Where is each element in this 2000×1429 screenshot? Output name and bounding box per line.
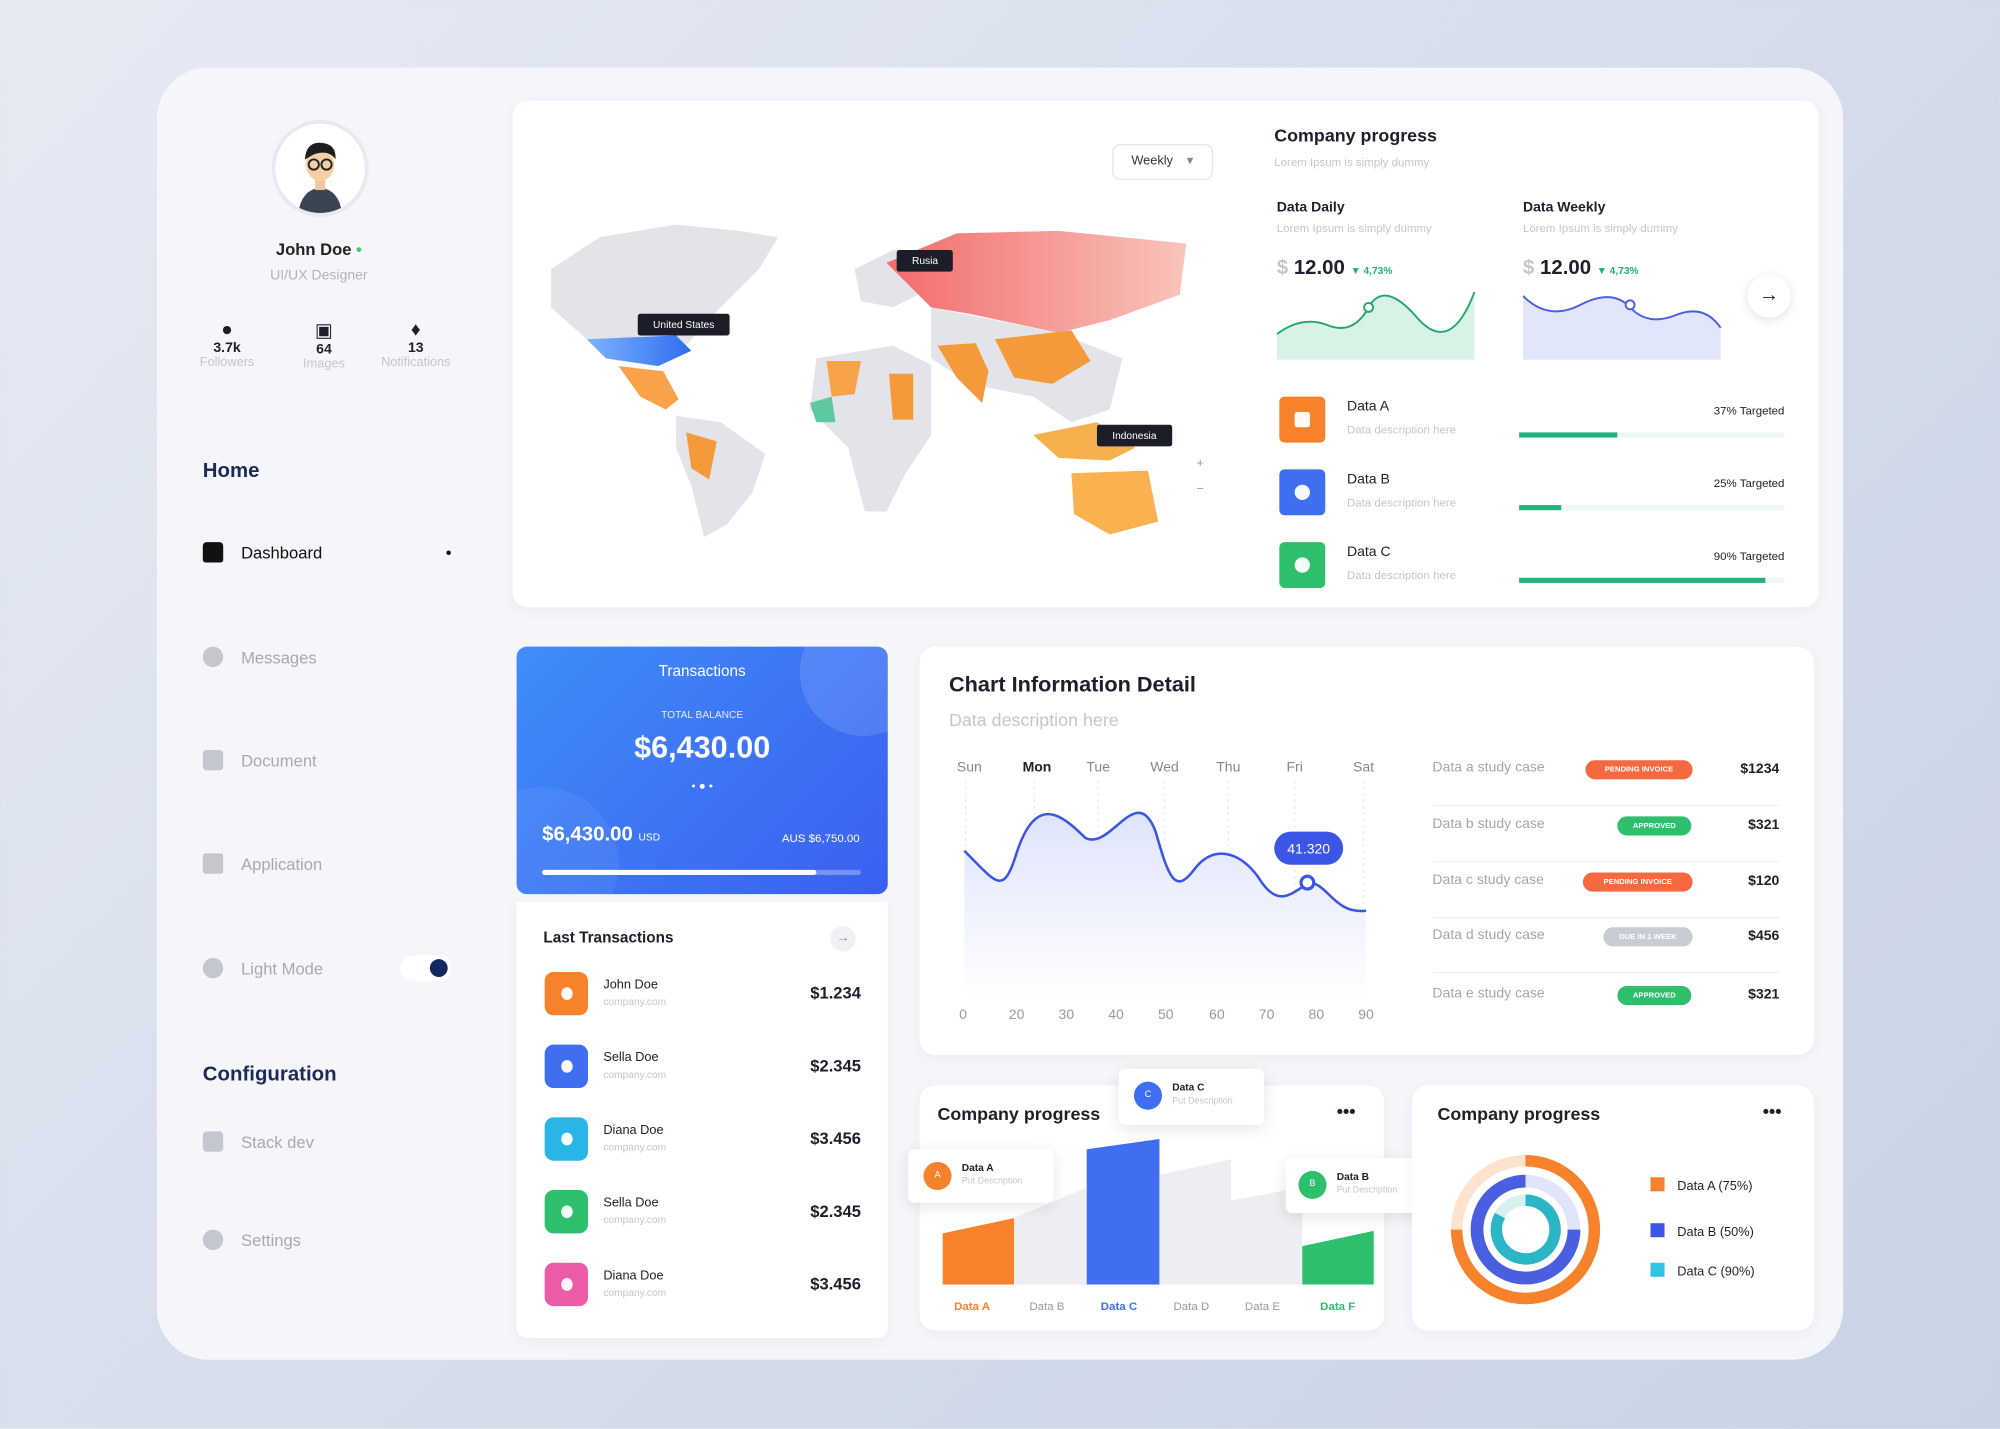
panel: company progress bar chart: Data E (1245, 1300, 1280, 1312)
line chart: Mon (1023, 759, 1051, 775)
legend: Data C (90%) (1677, 1265, 1755, 1279)
line chart: 40 (1108, 1006, 1124, 1022)
panel: transactions card: $6,430.00 (634, 731, 770, 765)
panel: last transactions: Sella Doe (603, 1051, 659, 1065)
panel: last transactions: Sella Doe (603, 1196, 659, 1210)
nav: application (202, 853, 322, 874)
data daily: Lorem Ipsum is simply dummy (1277, 222, 1432, 235)
line chart: 30 (1059, 1006, 1074, 1022)
line chart: Thu (1216, 759, 1240, 775)
study case list: $120 (1748, 874, 1779, 889)
line chart: 41.320 (1287, 840, 1330, 856)
panel: last transactions: Diana Doe (603, 1124, 664, 1138)
legend: Data A (75%) (1677, 1180, 1752, 1194)
panel: last transactions: $2.345 (810, 1056, 861, 1075)
name: John Doe • (276, 240, 362, 259)
nav: light mode (202, 956, 452, 980)
data daily: $ 12.00 ▼ 4,73% (1277, 258, 1392, 279)
callout: data B (1286, 1158, 1430, 1213)
data weekly: Data Weekly (1523, 200, 1605, 216)
panel: company progress bar chart: Data C (1101, 1300, 1137, 1312)
study case list: $321 (1748, 987, 1779, 1003)
callout: data A: Put Description (962, 1177, 1022, 1186)
data A row: 37% Targeted (1714, 404, 1784, 417)
data daily: Data Daily (1277, 200, 1345, 216)
data A row: Data description here (1347, 423, 1456, 436)
panel: last transactions: company.com (603, 1287, 666, 1298)
data A row: Data A (1347, 399, 1389, 415)
panel: last transactions: John Doe (603, 978, 658, 992)
nav: dashboard: • (446, 543, 452, 562)
callout: data C: Data C (1172, 1082, 1205, 1093)
data C row (1279, 542, 1784, 588)
data C row: Data C (1347, 545, 1391, 560)
panel: transactions card: TOTAL BALANCE (661, 709, 743, 721)
line chart: Fri (1286, 759, 1303, 775)
panel: last transactions: Last Transactions (543, 929, 674, 946)
panel: last transactions: company.com (603, 1214, 666, 1226)
data C row: Data description here (1347, 569, 1456, 582)
panel: last transactions: $3.456 (810, 1129, 861, 1148)
callout: data C: Put Description (1172, 1097, 1233, 1106)
panel: last transactions: company.com (603, 996, 666, 1008)
weekly dropdown: Weekly ▾ (1131, 154, 1193, 168)
callout: data C: C (1145, 1091, 1151, 1099)
stats: 64 (316, 342, 332, 357)
panel: last transactions: company.com (603, 1142, 666, 1153)
panel: company progress bar chart: Data B (1029, 1300, 1064, 1312)
data A row (1279, 396, 1784, 443)
panel: transactions card: AUS $6,750.00 (782, 832, 860, 844)
line chart: 80 (1309, 1006, 1324, 1022)
avatar (272, 120, 369, 217)
study case list: $1234 (1740, 761, 1779, 777)
stats: ♦ (411, 319, 421, 341)
callout: data A: A (935, 1171, 940, 1180)
nav: stack dev (202, 1131, 314, 1152)
panel: map and company progress (513, 101, 1819, 607)
callout: data A (908, 1149, 1054, 1203)
study case list: $321 (1748, 818, 1779, 833)
callout: data A: Data A (962, 1162, 994, 1173)
panel: last transactions: $3.456 (810, 1274, 861, 1293)
role: UI/UX Designer (270, 268, 368, 283)
line chart: Sun (957, 759, 982, 775)
nav: home: Home (203, 460, 260, 482)
panel: last transactions: $1.234 (810, 983, 861, 1003)
panel: last transactions: Diana Doe (603, 1269, 664, 1283)
stats: Notifications (381, 356, 451, 370)
study case list: Data a study case (1432, 760, 1545, 776)
panel: company progress bar chart: Company progress (937, 1103, 1100, 1124)
arrow button: → (1759, 284, 1779, 306)
nav: configuration: Configuration (203, 1064, 337, 1085)
study case list: Data d study case (1432, 927, 1545, 943)
panel: last transactions (517, 902, 888, 1338)
study case list: PENDING INVOICE (1604, 878, 1672, 886)
study case list (1432, 760, 1780, 1006)
panel: transactions card: • ● • (691, 779, 713, 792)
stats: 3.7k (213, 341, 241, 356)
zoom controls: − (1197, 482, 1204, 496)
panel: map and company progress: Indonesia (1112, 430, 1157, 441)
line chart: Sat (1353, 759, 1374, 775)
stats (200, 319, 451, 371)
callout: data B: B (1310, 1180, 1315, 1189)
panel: last transactions: $2.345 (810, 1202, 861, 1221)
sidebar profile (200, 120, 451, 371)
company progress heading: Company progress (1274, 125, 1437, 145)
data C row: 90% Targeted (1714, 550, 1784, 562)
panel: last transactions: company.com (603, 1069, 666, 1080)
panel: company progress donut (1412, 1085, 1814, 1330)
data daily (1276, 200, 1476, 360)
main card (157, 68, 1843, 1360)
legend: Data B (50%) (1677, 1226, 1754, 1240)
data B row: 25% Targeted (1714, 477, 1784, 490)
panel: company progress bar chart: Data F (1320, 1300, 1355, 1312)
stats: ● (221, 319, 233, 341)
line chart: Wed (1150, 759, 1179, 775)
panel: company progress donut: ••• (1763, 1101, 1782, 1121)
arrow button (1747, 274, 1791, 318)
panel: company progress bar chart: Data A (954, 1300, 990, 1312)
world map (551, 224, 1186, 537)
study case list: Data e study case (1432, 986, 1545, 1001)
map labels: United States (653, 319, 714, 330)
line chart: 90 (1358, 1006, 1374, 1022)
nav: messages: Messages (241, 647, 317, 666)
data B row (1279, 469, 1784, 516)
line chart (957, 759, 1374, 1022)
stats: ▣ (315, 320, 333, 342)
stats: 13 (408, 341, 424, 356)
nav: settings (202, 1230, 301, 1250)
data B row: Data description here (1347, 496, 1456, 509)
study case list: $456 (1748, 929, 1779, 944)
callout: data B: Data B (1337, 1171, 1369, 1182)
weekly dropdown (1112, 144, 1213, 180)
nav: application: Application (241, 854, 322, 873)
study case list: DUE IN 1 WEEK (1619, 933, 1677, 941)
panel: chart information detail (920, 647, 1814, 1055)
panel: chart information detail: Data description here (949, 709, 1119, 730)
panel: company progress bar chart: ••• (1337, 1101, 1356, 1121)
map labels (638, 314, 730, 335)
panel: chart information detail: Chart Information Detail (949, 672, 1196, 696)
panel: map and company progress: Lorem Ipsum is simply dummy (1274, 156, 1429, 168)
panel: company progress bar chart (920, 1085, 1384, 1330)
study case list: PENDING INVOICE (1605, 766, 1673, 774)
data B row: Data B (1347, 472, 1390, 487)
line chart: 60 (1209, 1006, 1225, 1022)
stats: Images (303, 357, 345, 371)
zoom controls (1197, 457, 1204, 496)
panel: transactions card: $6,430.00 USD (542, 824, 660, 846)
nav: dashboard: Dashboard (241, 543, 322, 562)
stats: Followers (200, 356, 254, 370)
legend (1650, 1177, 1755, 1279)
line chart: 70 (1259, 1006, 1275, 1022)
nav: stack dev: Stack dev (241, 1132, 314, 1151)
study case list: APPROVED (1633, 822, 1676, 830)
study case list: Data b study case (1432, 816, 1545, 832)
panel: transactions card: Transactions (659, 662, 746, 680)
callout: data C (1119, 1069, 1264, 1125)
nav: dashboard (202, 542, 452, 562)
nav: settings: Settings (241, 1230, 301, 1249)
nav: light mode: Light Mode (241, 959, 323, 978)
line chart: 50 (1158, 1006, 1174, 1022)
donut chart (1450, 1155, 1600, 1304)
panel: last transactions: → (837, 931, 849, 945)
panel: company progress bar chart: Data D (1173, 1300, 1209, 1312)
data weekly: Lorem Ipsum is simply dummy (1523, 222, 1678, 235)
nav: document: Document (241, 751, 317, 770)
line chart: 0 (959, 1006, 967, 1022)
callout: data B: Put Description (1337, 1186, 1397, 1195)
nav: messages (202, 646, 317, 668)
line chart: 20 (1009, 1006, 1025, 1022)
zoom controls: + (1197, 457, 1204, 471)
study case list: APPROVED (1633, 992, 1676, 999)
panel: map and company progress: Rusia (912, 255, 938, 267)
panel: transactions card (517, 647, 888, 894)
line chart: Tue (1086, 759, 1110, 775)
panel: company progress donut: Company progress (1437, 1103, 1600, 1124)
nav: document (202, 750, 317, 770)
data weekly: $ 12.00 ▼ 4,73% (1523, 258, 1639, 279)
data weekly (1522, 200, 1722, 360)
study case list: Data c study case (1432, 872, 1544, 888)
